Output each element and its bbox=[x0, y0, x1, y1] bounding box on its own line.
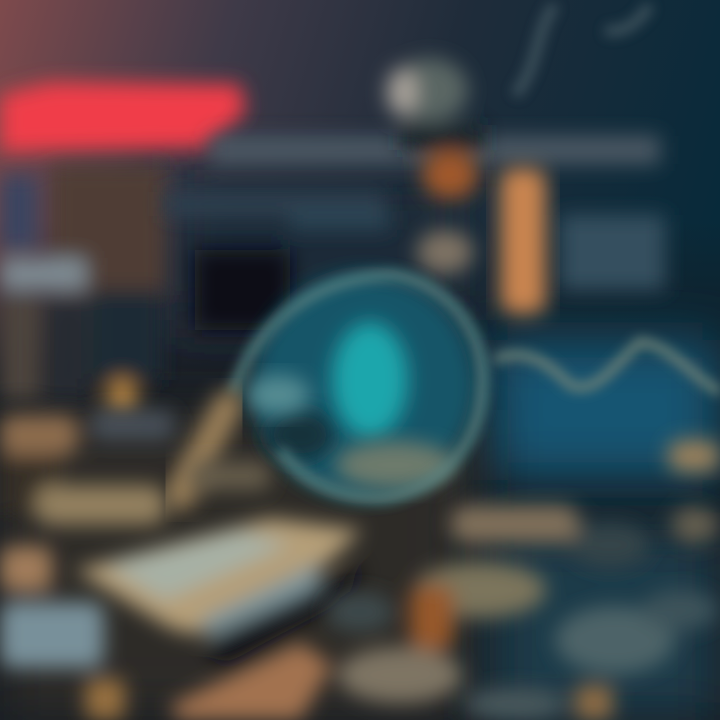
chart smoke line top right bbox=[515, 5, 650, 95]
lens teal symbol bbox=[332, 322, 408, 438]
orange pillar bbox=[500, 168, 546, 314]
lens lower reflection bbox=[335, 441, 455, 489]
upper chart bands bbox=[165, 136, 665, 330]
handle bbox=[180, 405, 228, 495]
lens dark interior bbox=[266, 409, 334, 461]
lens left highlight bbox=[246, 375, 310, 415]
lens bbox=[253, 273, 477, 497]
central figure bbox=[387, 58, 485, 274]
trend line on right bbox=[495, 342, 720, 392]
lens rim bbox=[232, 275, 483, 498]
left building and columns bbox=[0, 165, 165, 418]
magnifying glass bbox=[180, 273, 483, 498]
open book bbox=[75, 518, 365, 665]
lower coins bbox=[170, 440, 720, 720]
coins and books pile, left bbox=[0, 410, 270, 720]
red sign bar bbox=[0, 82, 246, 152]
